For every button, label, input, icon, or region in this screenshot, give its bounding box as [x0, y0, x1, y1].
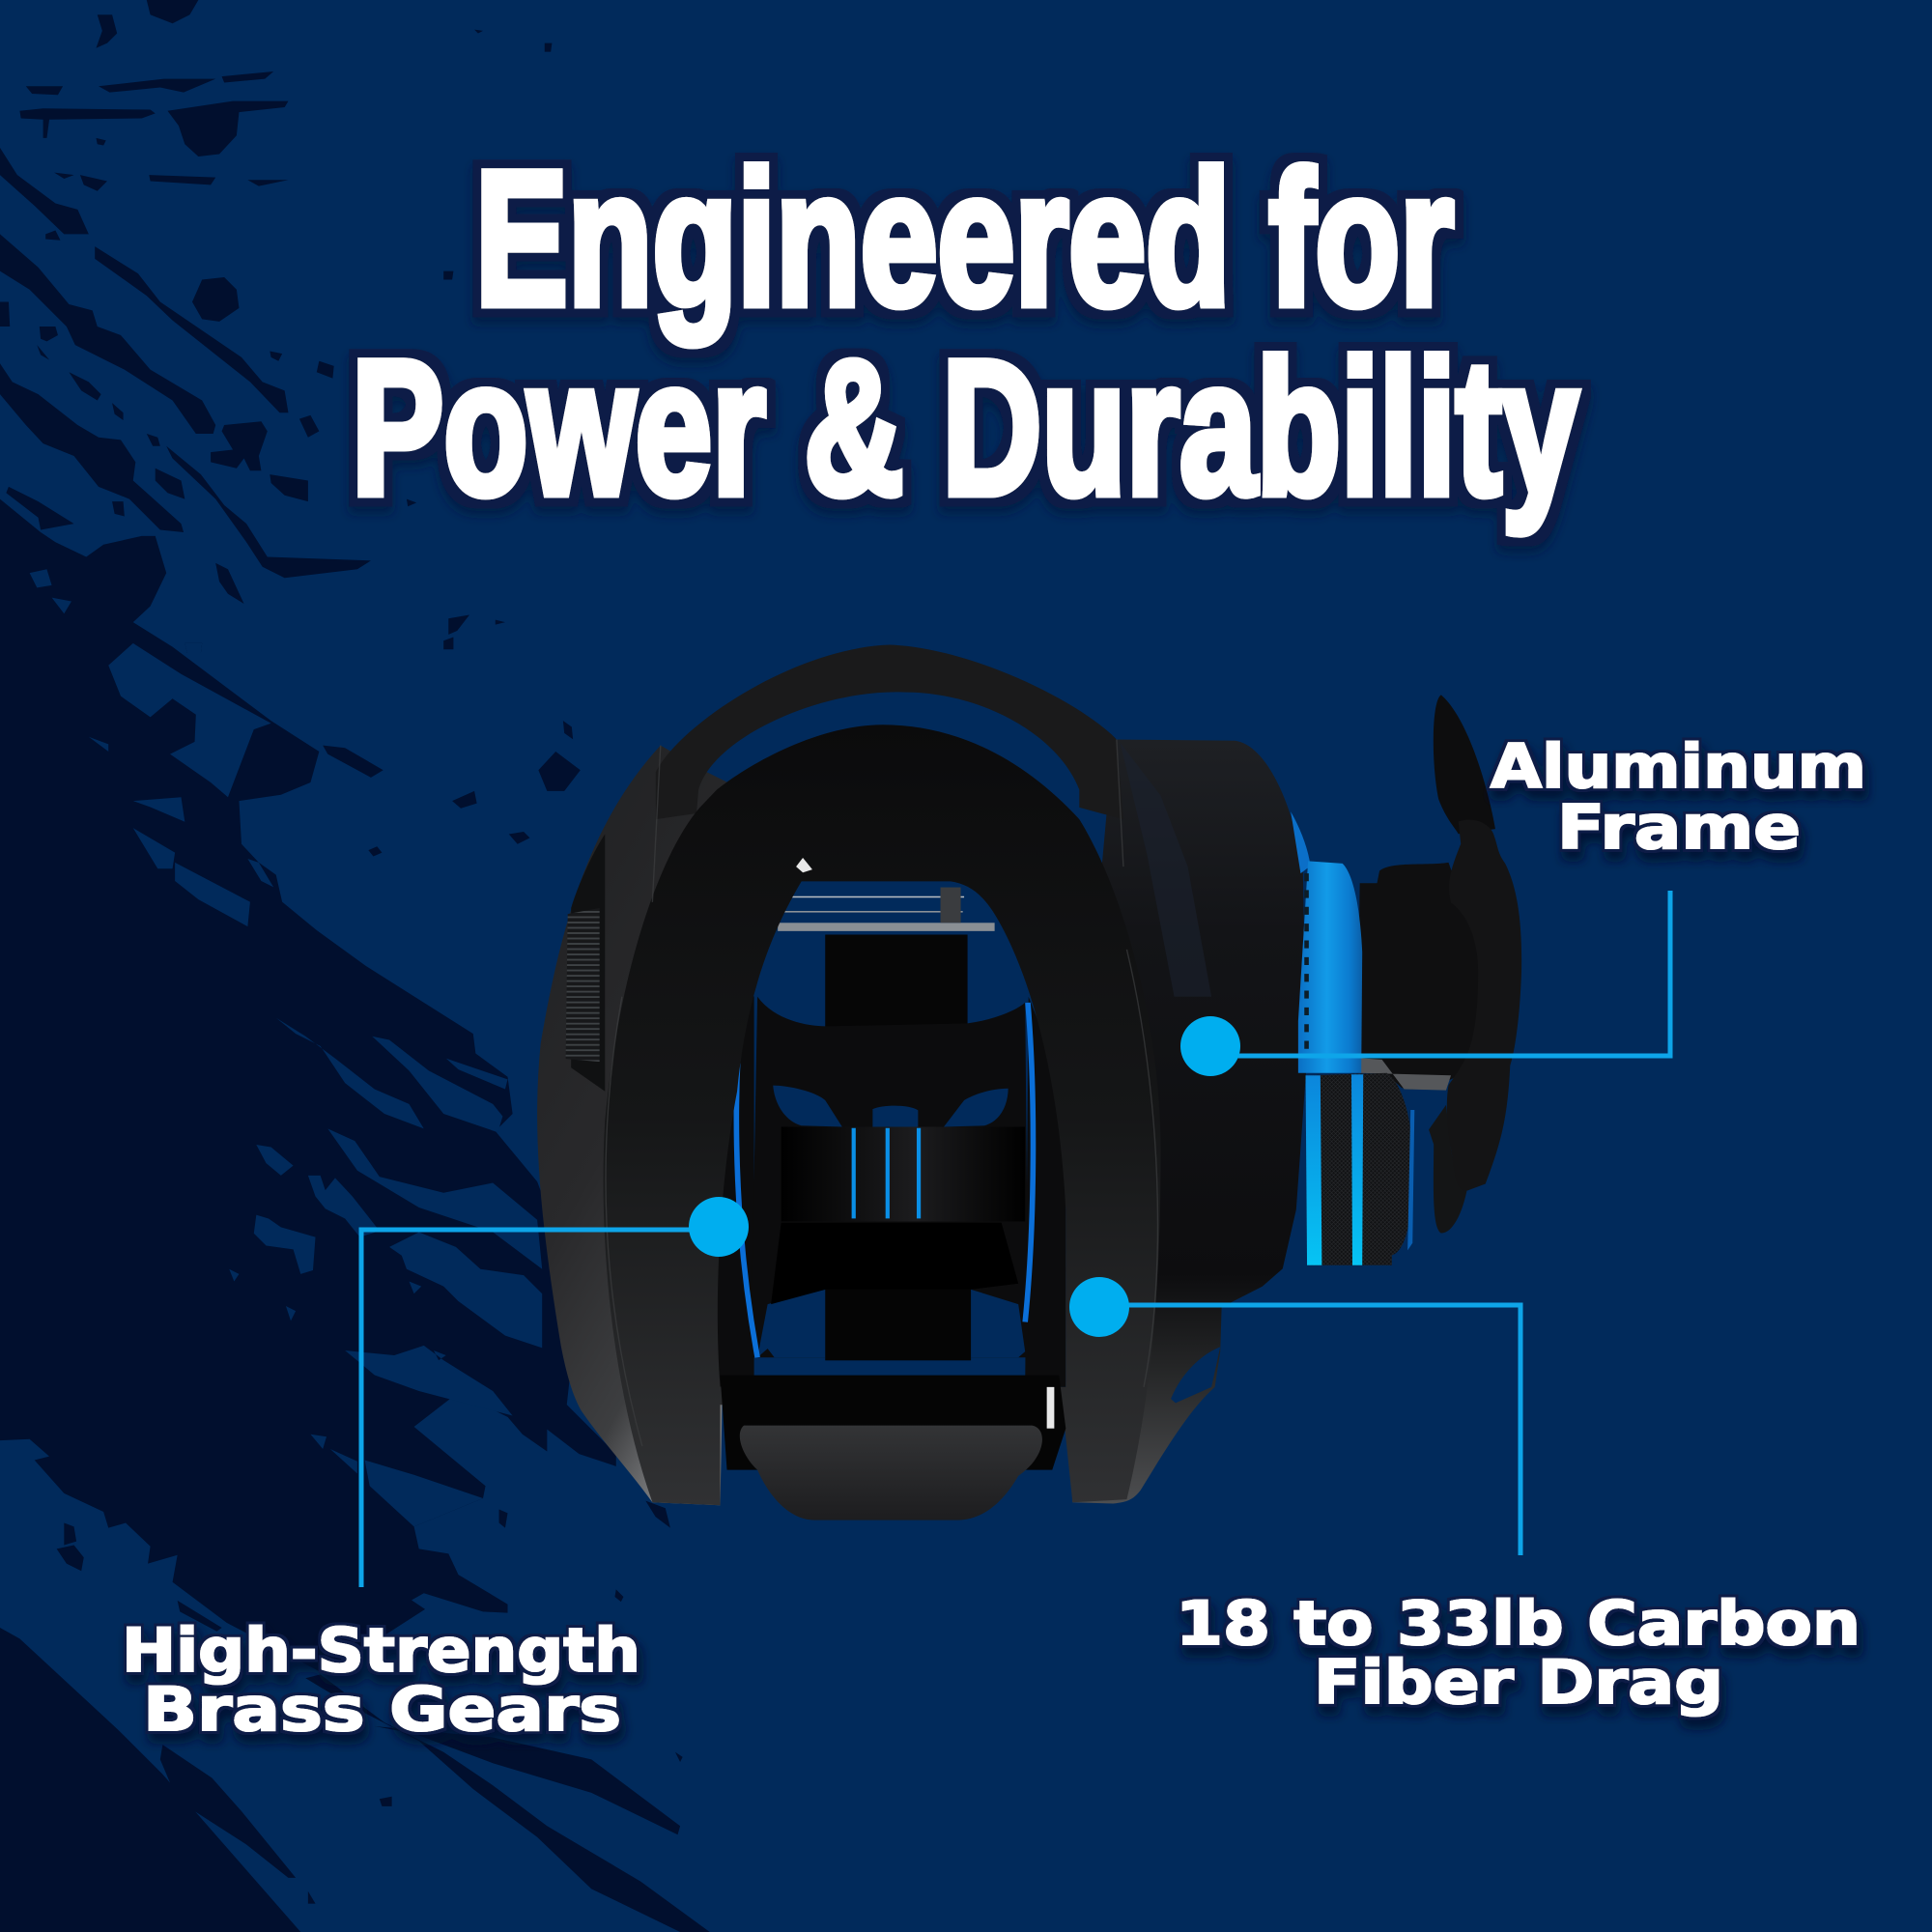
- handle silver neck: [1360, 1058, 1451, 1091]
- callout: brass gears connector: [361, 1197, 749, 1587]
- level wind rods: [778, 888, 995, 931]
- drag star knob: [1306, 1073, 1414, 1265]
- callout: carbon drag connector: [1069, 1277, 1520, 1555]
- label: brass gears: [122, 1615, 640, 1745]
- spool shadows: [714, 988, 1065, 1387]
- title: Engineered for: [475, 131, 1454, 345]
- fishing reel product: [537, 645, 1521, 1520]
- reel side slot: [1171, 1347, 1220, 1403]
- blue plate rim: [1291, 811, 1311, 873]
- spool: [736, 935, 1033, 1360]
- front frame arch: [604, 724, 1161, 1505]
- callout: aluminum frame connector: [1180, 891, 1670, 1076]
- second handle blade: [1429, 1105, 1466, 1234]
- label: aluminum frame: [1491, 731, 1866, 863]
- handle hub: [1357, 863, 1510, 1090]
- main handle arm: [1447, 820, 1521, 1191]
- reel left side plate: [537, 746, 754, 1505]
- bottom foot: [721, 1376, 1065, 1520]
- label: carbon fiber drag: 18 to 33lb Carbon: [1176, 1588, 1861, 1659]
- frame highlight: [796, 858, 812, 872]
- label: brass gears: High-Strength: [122, 1615, 640, 1686]
- handle assembly: [1291, 695, 1521, 1265]
- top handle blade: [1434, 695, 1495, 834]
- paint splatter texture: [0, 0, 710, 1932]
- reel right side plate: [1065, 740, 1306, 1503]
- label: aluminum frame: Frame: [1557, 792, 1801, 863]
- thumb wheel recess: [571, 834, 605, 1092]
- label: carbon fiber drag: Fiber Drag: [1314, 1647, 1723, 1718]
- reel top handle arc: [656, 645, 1123, 819]
- blue ring: [1298, 861, 1362, 1073]
- label: aluminum frame: Aluminum: [1491, 731, 1866, 802]
- title: [352, 131, 1578, 534]
- body panel lines: [606, 740, 1157, 1446]
- label: carbon fiber drag: [1176, 1588, 1861, 1718]
- label: brass gears: Brass Gears: [143, 1674, 621, 1745]
- thumb wheel: [566, 908, 600, 1062]
- ring engraving: [1302, 873, 1311, 1051]
- plate facet highlight: [1120, 743, 1211, 997]
